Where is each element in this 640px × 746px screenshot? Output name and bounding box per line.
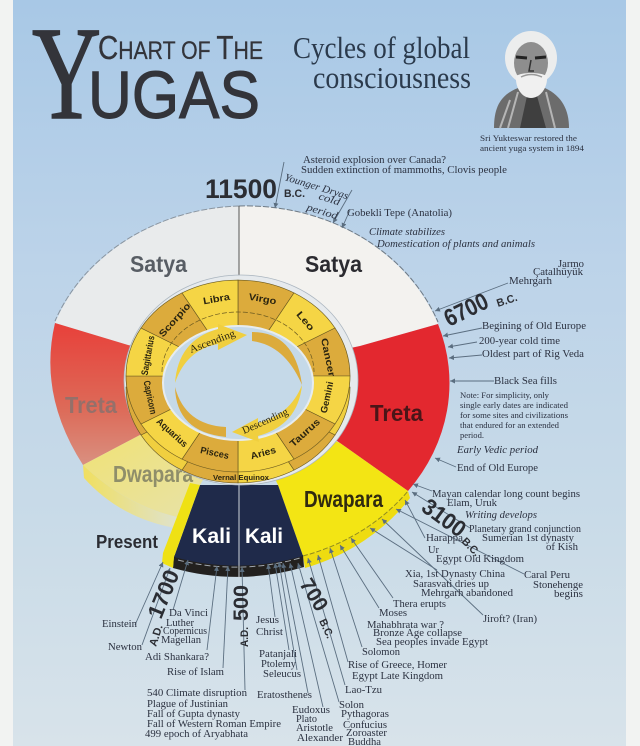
date: 3100 B.C.: B.C. [459,536,482,559]
panel: Dwapara right edge [303,491,410,568]
text: 3100 BC events: Sumerian 1st dynasty [482,533,575,544]
date: 3100 B.C.: 3100 [417,493,471,542]
text: Old Europe events: Black Sea fills [494,376,557,387]
label: Present: Present [96,532,158,552]
zodiac labels: Gemini [319,381,336,414]
panel: Treta right [238,324,449,491]
text: Gobekli Tepe: Gobekli Tepe (Anatolia) [347,208,453,219]
panel: Satya left [55,206,239,372]
date: 6700 B.C.: B.C. [495,292,519,310]
text: Xia to Mehrgarh: Mehrgarh abandoned [421,588,514,599]
panel: Satya right [238,206,438,372]
text: asteroid event: Sudden extinction of mammoths, Clovis people [301,165,507,176]
date: A.D. 1700 [142,566,184,648]
text: Old Europe events: 200-year cold time [479,336,560,347]
text: Adi Shankara and Islam [145,652,224,678]
zodiac labels: Aries [249,445,277,462]
text: early settlements: Çatalhüyük [533,267,584,278]
zodiac labels [140,292,337,482]
text: renaissance figures [161,608,208,646]
zodiac ring face [126,280,350,472]
text: climate and domestication [369,227,535,250]
text: early settlements: Jarmo [558,259,584,270]
caption: portrait: Sri Yukteswar restored the [480,133,577,143]
date: 700 B.C. [295,574,336,640]
zodiac labels: Capricorn [141,380,158,415]
panel: Treta left [50,323,238,465]
text: bronze age events: Sea peoples invade Egypt [376,637,488,648]
text: classical collapse events: Fall of Gupta dynasty [147,709,241,720]
text: axial age thinkers: Pythagoras [341,709,389,720]
text: renaissance figures: Luther [166,618,194,629]
date: 11500 B.C.: 11500 [205,174,277,204]
text: bronze age events: Rise of Greece, Homer [348,660,448,671]
subtitle: Cycles of global consciousness: Cycles of global [293,30,470,65]
text: ascending and descending: Descending [241,406,291,437]
text: asteroid event: Asteroid explosion over Canada? [303,155,446,166]
text: renaissance figures: Da Vinci [169,608,208,619]
text: bronze age events: Moses [379,608,407,619]
zodiac labels: Scorpio [157,301,193,340]
text: Einstein and Newton [102,619,143,653]
text: note [460,390,569,440]
date: 700 B.C.: B.C. [316,617,336,640]
zodiac labels: Vernal Equinox [213,473,270,482]
text: Jiroft: Jiroft? (Iran) [483,614,537,625]
text: classical collapse events: Plague of Justinian [147,699,229,710]
zodiac labels: Sagittarius [140,335,157,376]
zodiac labels: Virgo [248,292,277,307]
date: 11500 B.C.: B.C. [284,188,305,200]
text: Greek thinkers: Eudoxus [292,705,330,716]
text: Adi Shankara and Islam: Adi Shankara? [145,652,209,663]
arc: lower left [175,387,226,437]
text: Younger Dryas: cold [317,191,342,209]
zodiac labels: Leo [294,309,316,334]
text: Einstein and Newton: Einstein [102,619,138,630]
dashed outer edge [239,206,438,322]
text: Greek thinkers: Alexander [297,733,344,744]
icon: portrait of Sri Yukteswar [494,31,569,128]
caption: portrait [480,133,585,153]
text: ascending and descending: Ascending [188,328,238,356]
text: Greek thinkers: Eratosthenes [257,690,312,701]
yuga labels: Treta [370,400,423,426]
date: A.D. 1700: A.D. [147,623,166,648]
yuga labels: Satya [305,251,362,277]
panel: Dwapara left edge [83,465,177,528]
panel: Dwapara right [238,400,408,556]
title: Chart of the Yugas: Y [32,0,101,147]
text: Patanjali group: Patanjali [259,649,297,660]
leader arrows [135,162,524,707]
title: Chart of the Yugas: CHART OF THE [98,29,263,66]
date: 6700 B.C.: 6700 [440,288,493,332]
zodiac centre opening [163,326,313,440]
text: 3100 BC events: Planetary grand conjunction [469,524,582,535]
text: bronze age events: Lao-Tzu [345,685,383,696]
text: Einstein and Newton: Newton [108,642,143,653]
text: Jesus Christ [256,615,283,638]
text: 3100 BC events: of Kish [546,542,579,553]
text: ascending and descending [188,328,291,437]
text: early settlements [509,259,584,287]
text: classical collapse events: 499 epoch of Aryabhata [145,729,248,740]
yuga labels: Dwapara [304,486,383,512]
text: bronze age events [345,599,488,696]
subtitle: Cycles of global consciousness [293,30,471,95]
text: renaissance figures: Magellan [161,635,202,646]
chart: yuga wheel [50,206,449,578]
text: Younger Dryas [283,172,349,222]
text: 3100 BC events: Mayan calendar long count begins [432,489,580,500]
text: 3100 BC events [426,489,582,565]
zodiac shadow ring [124,275,358,485]
date: 700 B.C.: 700 [295,574,332,615]
date: A.D. 500: A.D. [239,627,251,647]
text: classical collapse events: 540 Climate disruption [147,688,248,699]
text: bronze age events: Mahabhrata war ? [367,620,444,631]
text: bronze age events: Solomon [362,647,401,658]
date: 3100 B.C. [417,493,482,559]
text: note: Note: For simplicity, only [460,390,550,400]
panel: Kali edge [173,555,304,577]
text: Old Europe events [479,321,586,387]
text: Xia to Mehrgarh: Sarasvati dries up [413,579,489,590]
text: 3100 BC events: Harappa [426,533,463,544]
text: note: for some sites and civilizations [460,410,568,420]
arrow: descending [232,385,302,442]
text: Jesus Christ: Jesus [256,615,279,626]
zodiac ring side [126,387,350,483]
date: A.D. 500 [230,585,253,647]
text: 3100 BC events: Elam, Uruk [447,498,498,509]
text: axial age thinkers [339,700,389,746]
text: 3100 BC events: Ur [428,545,439,556]
text: Patanjali group: Seleucus [263,669,301,680]
text: note: that endured for an extended [460,420,560,430]
text: axial age thinkers: Confucius [343,720,387,731]
text: bronze age events: Thera erupts [393,599,446,610]
text: asteroid event [301,155,507,176]
text: Vedic and Old Europe end: Early Vedic period [456,445,539,456]
text: classical collapse events [145,688,281,740]
text: bronze age events: Bronze Age collapse [373,628,462,639]
date: A.D. 500: 500 [230,585,253,621]
zodiac labels: Libra [202,292,232,307]
yuga labels [65,251,423,548]
text: classical collapse events: Fall of Western Roman Empire [147,719,281,730]
yuga labels: Satya [130,251,187,277]
text: Adi Shankara and Islam: Rise of Islam [167,667,224,678]
text: Greek thinkers [257,690,344,744]
yuga labels: Dwapara [113,461,193,487]
yuga labels: Kali [245,525,283,548]
yuga labels: Treta [65,392,117,418]
text: Caral and Stonehenge: begins [554,589,583,600]
text: Younger Dryas: Younger Dryas [283,172,349,202]
text: axial age thinkers: Zoroaster [346,728,388,739]
arc: upper right [252,332,302,385]
text: Caral and Stonehenge: Caral Peru [524,570,571,581]
text: early settlements: Mehrgarh [509,276,553,287]
title: Chart of the Yugas: UGAS [88,58,260,133]
zodiac labels: Aquarius [154,416,189,450]
arrow: ascending [175,324,247,383]
text: Patanjali group: Ptolemy [261,659,297,670]
text: climate and domestication: Climate stabilizes [369,227,445,238]
text: axial age thinkers: Solon [339,700,365,711]
text: note: period. [460,430,484,440]
text: Caral and Stonehenge: Stonehenge [533,580,583,591]
text: Patanjali group [259,649,301,680]
title: Chart of the Yugas [32,0,263,147]
central axis [238,206,240,285]
text: Old Europe events: Oldest part of Rig Veda [482,349,584,360]
panel: present strip [162,483,200,568]
zodiac labels: Cancer [318,337,337,378]
text: Old Europe events: Begining of Old Europe [482,321,586,332]
text: Xia to Mehrgarh: Xia, 1st Dynasty China [405,569,505,580]
date: A.D. 1700: 1700 [142,566,184,622]
text: Jesus Christ: Christ [256,627,283,638]
text: 3100 BC events: Egypt Old Kingdom [436,554,524,565]
text: Vedic and Old Europe end: End of Old Europe [457,463,538,474]
text: Caral and Stonehenge [524,570,583,600]
yuga labels: Kali [192,525,231,548]
text: climate and domestication: Domestication of plants and animals [376,239,535,250]
text: Greek thinkers: Aristotle [296,723,333,734]
panel: Kali [174,485,303,566]
text: Greek thinkers: Plato [296,714,317,725]
text: bronze age events: Egypt Late Kingdom [352,671,443,682]
text: Younger Dryas: period [304,202,340,222]
text: Vedic and Old Europe end [456,445,539,474]
panel: Dwapara left [83,420,238,517]
text: note: single early dates are indicated [460,400,569,410]
text: Xia to Mehrgarh [405,569,514,599]
zodiac labels: Taurus [288,417,323,450]
text: renaissance figures: Copernicus [163,626,207,637]
subtitle: Cycles of global consciousness: consciousness [313,60,471,95]
caption: portrait: ancient yuga system in 1894 [480,143,585,153]
text: 3100 BC events: Writing develops [465,510,537,521]
zodiac labels: Pisces [199,445,230,462]
